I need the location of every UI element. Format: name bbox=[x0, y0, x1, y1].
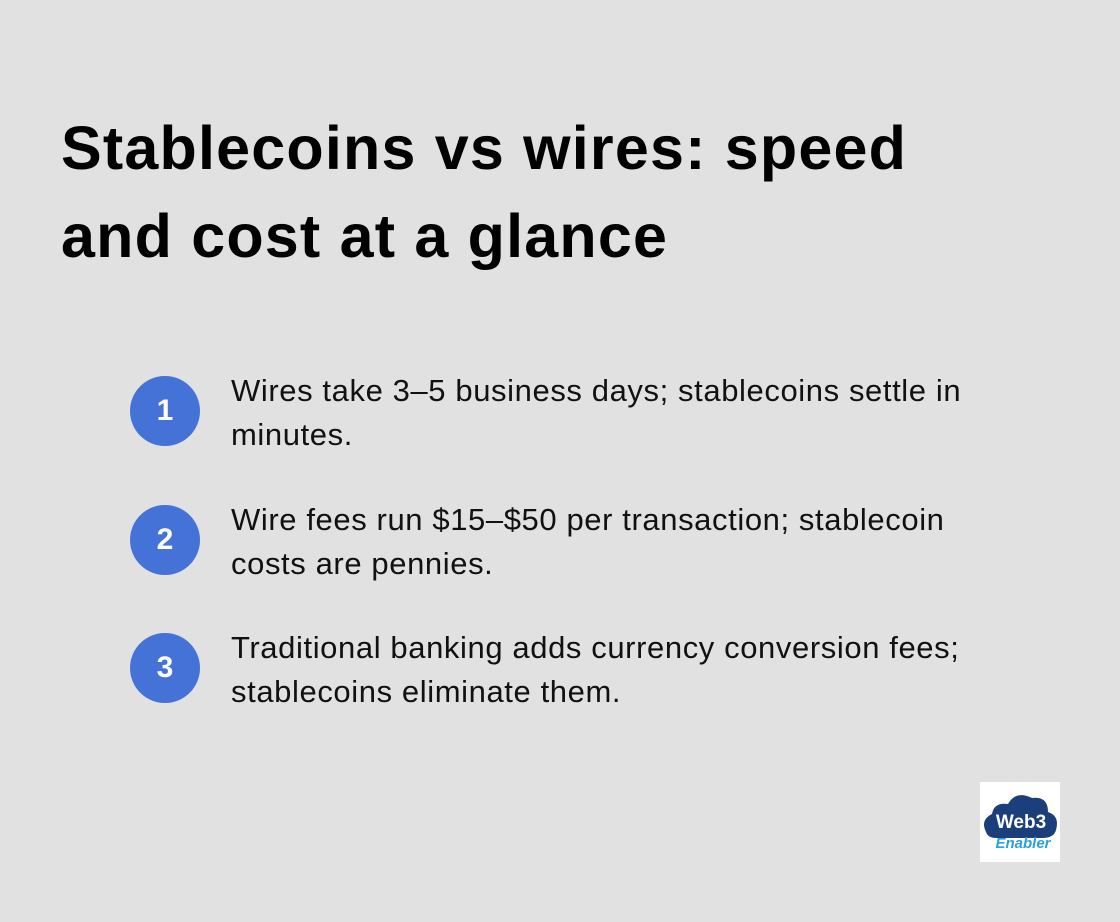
badge 1: 1 bbox=[157, 394, 173, 427]
item 2 bbox=[130, 502, 945, 581]
badge 2 bbox=[130, 505, 200, 575]
text 2: Wire fees run $15–$50 per transaction; stablecoin bbox=[231, 502, 945, 537]
logo: Web3 bbox=[996, 812, 1046, 833]
badge 2: 2 bbox=[157, 523, 173, 556]
title: Stablecoins vs wires: speed bbox=[61, 114, 907, 182]
item 3 bbox=[130, 630, 959, 709]
text 3 bbox=[231, 630, 959, 709]
badge 3: 3 bbox=[157, 651, 173, 684]
title bbox=[61, 114, 907, 270]
text 3: Traditional banking adds currency conversion fees; bbox=[231, 630, 959, 665]
text 1: minutes. bbox=[231, 417, 353, 452]
text 2: costs are pennies. bbox=[231, 546, 493, 581]
badge 1 bbox=[130, 376, 200, 446]
text 1: Wires take 3–5 business days; stablecoins settle in bbox=[231, 373, 961, 408]
logo: Enabler bbox=[995, 835, 1052, 852]
badge 3 bbox=[130, 633, 200, 703]
text 2 bbox=[231, 502, 945, 581]
item 1 bbox=[130, 373, 961, 452]
text 1 bbox=[231, 373, 961, 452]
logo bbox=[980, 782, 1060, 862]
title: and cost at a glance bbox=[61, 202, 668, 270]
text 3: stablecoins eliminate them. bbox=[231, 674, 621, 709]
